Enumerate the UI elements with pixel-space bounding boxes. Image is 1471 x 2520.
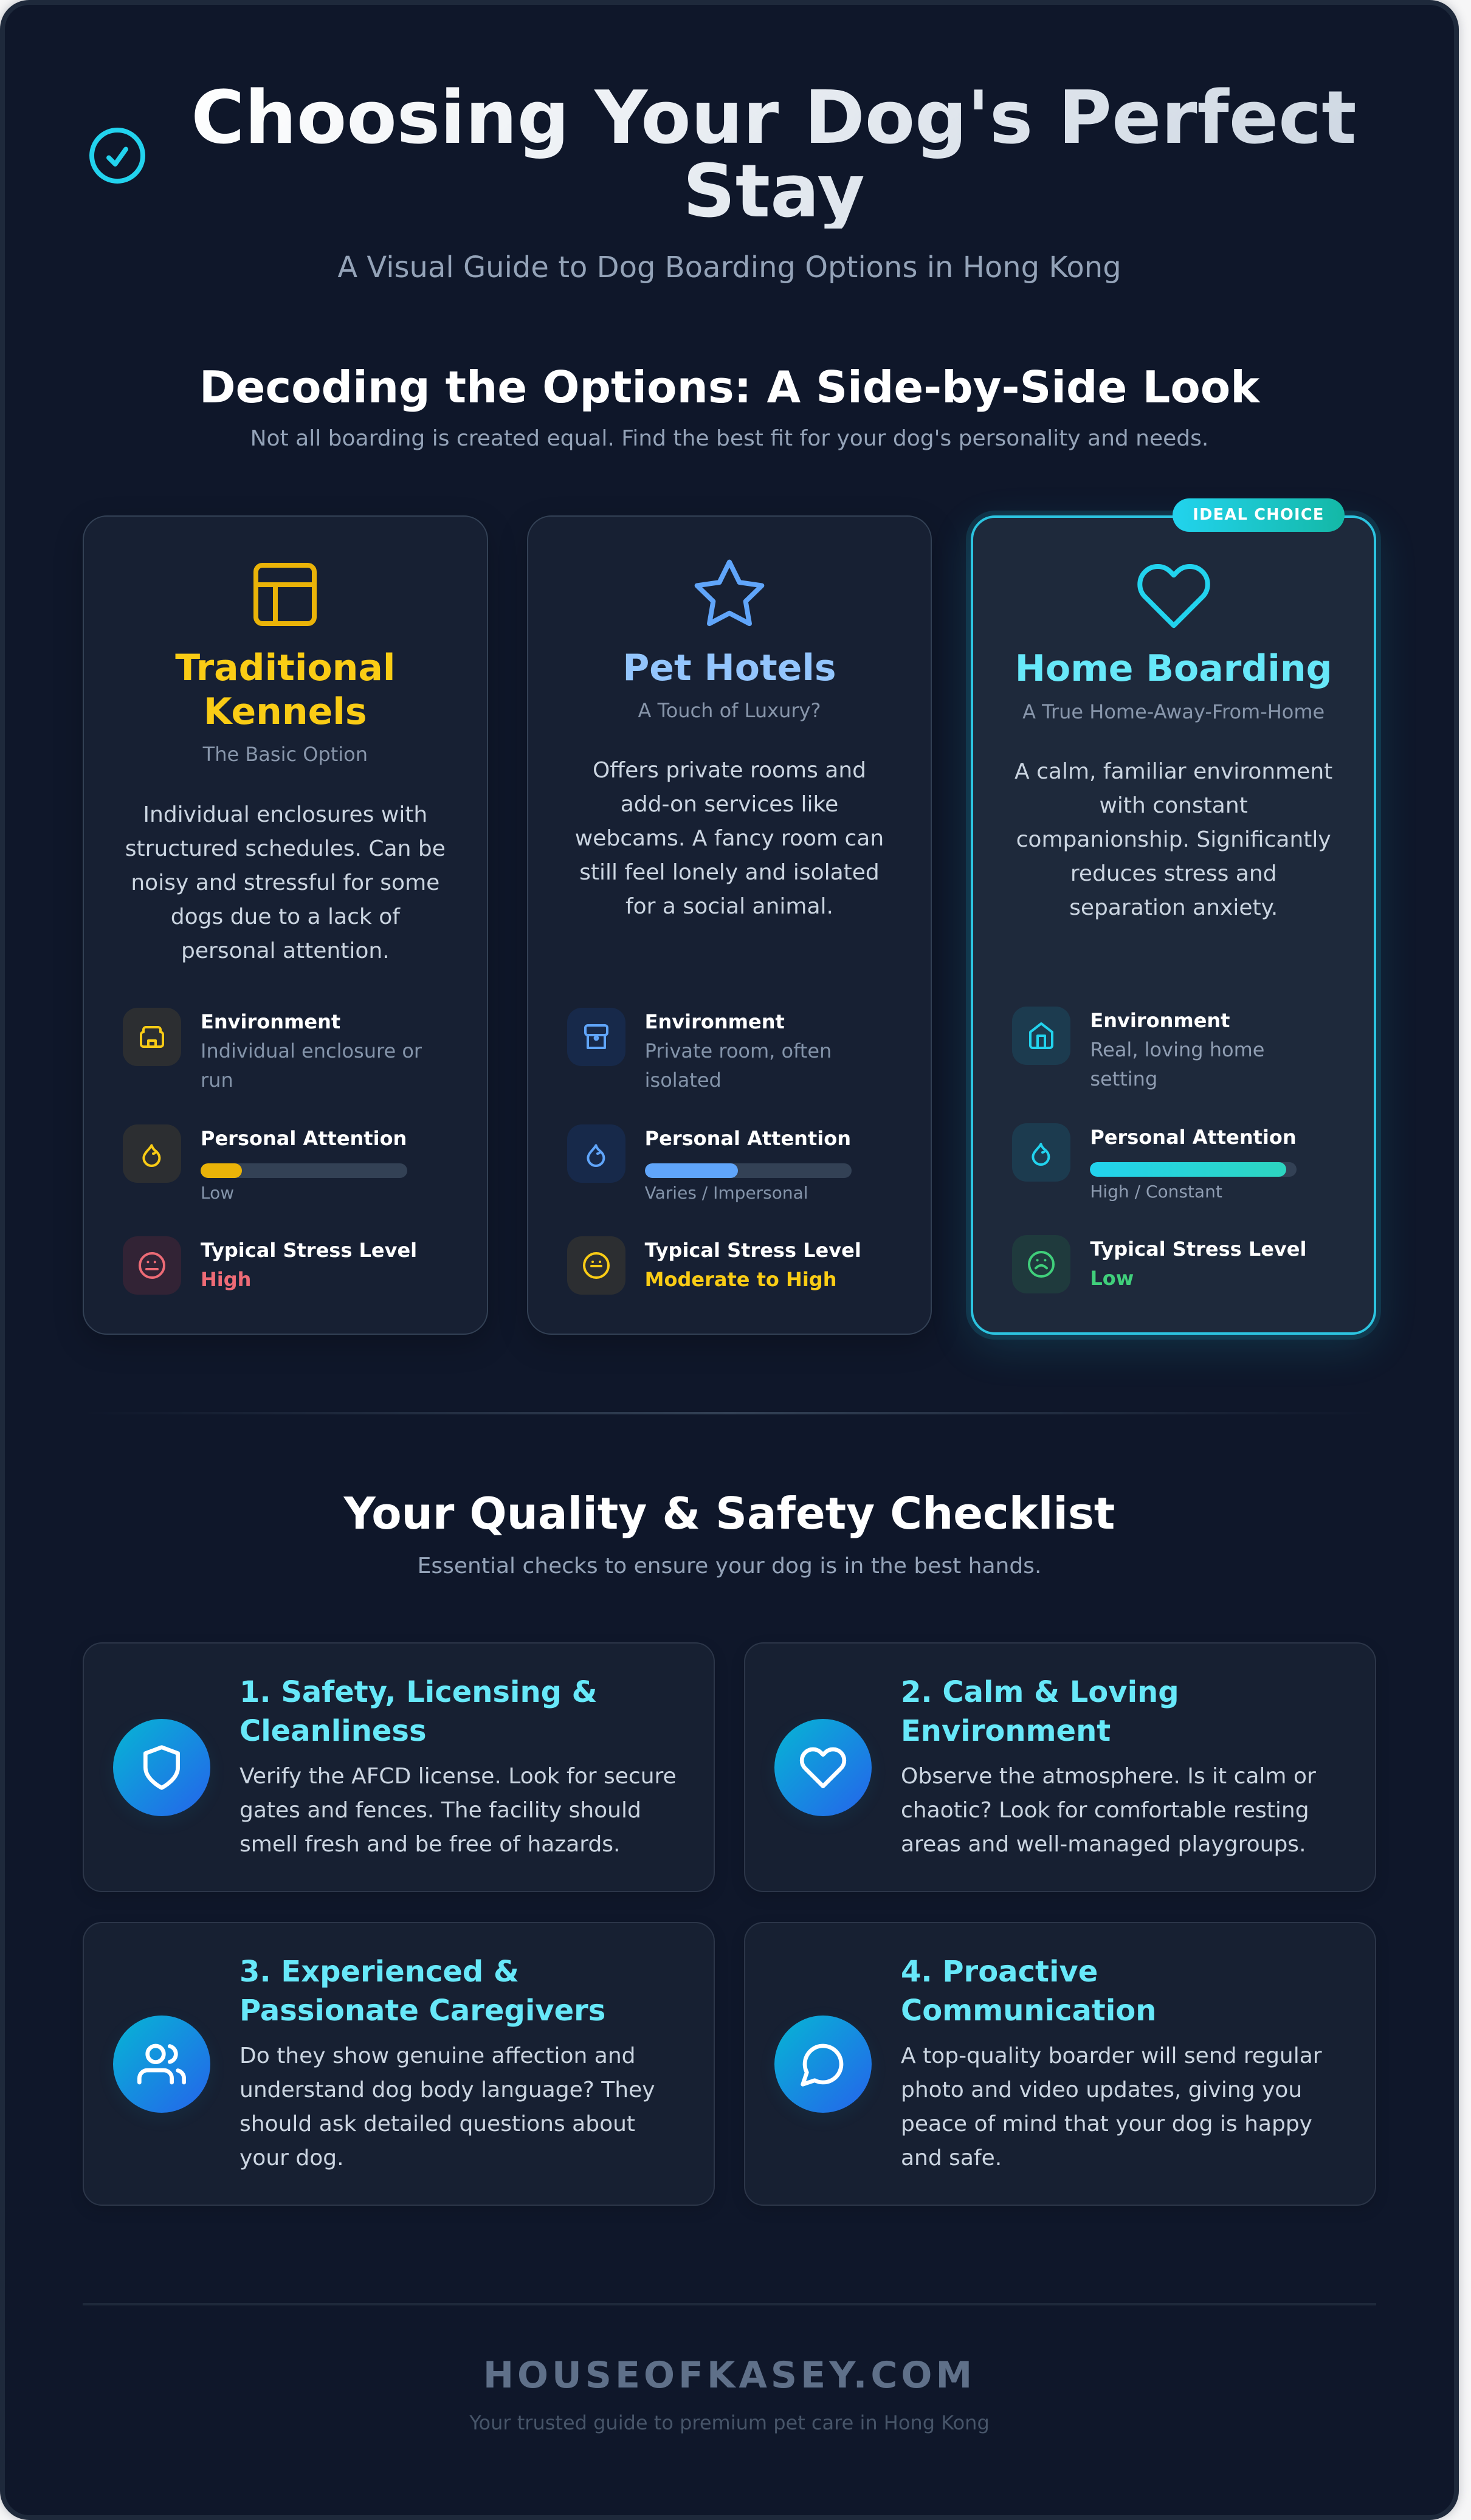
card description: webcams. A fancy room can (575, 826, 884, 851)
icon: flame (567, 1124, 625, 1183)
feature: environment (1012, 1007, 1264, 1090)
text: checklist intro: Essential checks to ensure your dog is in the best hands. (418, 1554, 1041, 1578)
panel: traditional kennels (83, 515, 488, 1335)
check heading: Passionate Caregivers (239, 1994, 605, 2028)
check heading: Cleanliness (239, 1714, 427, 1748)
icon: flame (123, 1124, 181, 1183)
label: Typical Stress Level (201, 1239, 417, 1262)
card description: with constant (1099, 793, 1248, 818)
value: High (201, 1268, 251, 1291)
value (1090, 1038, 1264, 1090)
card description: noisy and stressful for some (131, 870, 439, 895)
check text: your dog. (239, 2146, 344, 2171)
icon: flame (1012, 1123, 1070, 1182)
check text (901, 2039, 1322, 2175)
card subtitle: A Touch of Luxury? (638, 699, 821, 722)
feature: stress level (123, 1236, 417, 1295)
panel: home boarding (960, 498, 1387, 1357)
card description: personal attention. (181, 938, 390, 963)
card description: still feel lonely and isolated (579, 860, 880, 885)
check text: Do they show genuine affection and (239, 2043, 635, 2068)
check heading: 1. Safety, Licensing & (239, 1675, 598, 1709)
value: run (201, 1069, 233, 1092)
feature: stress level (567, 1236, 861, 1295)
badge: ideal choice: IDEAL CHOICE (1193, 506, 1325, 524)
feature: environment (567, 1008, 832, 1092)
value: Low (1090, 1267, 1134, 1290)
badge: ideal choice (1173, 498, 1345, 532)
card description: dogs due to a lack of (171, 904, 400, 929)
value (201, 1039, 422, 1092)
card description: structured schedules. Can be (125, 836, 446, 861)
icon: shield (113, 1719, 210, 1816)
footer brand: HOUSEOFKASEY.COM (483, 2354, 976, 2397)
feature: personal attention (567, 1124, 852, 1203)
progress bar: high (1090, 1162, 1297, 1177)
card title: home boarding: Home Boarding (1015, 647, 1332, 690)
icon: flat face (567, 1236, 625, 1295)
card subtitle: A True Home-Away-From-Home (1022, 700, 1325, 723)
card description: separation anxiety. (1069, 895, 1278, 920)
icon: heart (1137, 564, 1210, 628)
panel: pet hotels (527, 515, 932, 1335)
label: Typical Stress Level (645, 1239, 861, 1262)
check heading (239, 1673, 598, 1751)
card description: companionship. Significantly (1016, 827, 1331, 852)
check text: areas and well-managed playgroups. (901, 1832, 1306, 1857)
heading: decoding the options: Decoding the Options: A Side-by-Side Look (199, 362, 1259, 413)
label: Environment (201, 1010, 340, 1033)
label: Personal Attention (645, 1127, 851, 1150)
panel: safety, licensing and cleanliness (83, 1642, 715, 1892)
icon: chat bubble (774, 2016, 872, 2113)
check text: gates and fences. The facility should (239, 1798, 641, 1823)
card description: Individual enclosures with (143, 802, 427, 827)
text: decoding section intro: Not all boarding is created equal. Find the best fit for your dog's personality and needs. (250, 425, 1208, 451)
value: Moderate to High (645, 1268, 836, 1291)
check text: smell fresh and be free of hazards. (239, 1832, 621, 1857)
heading: checklist: Your Quality & Safety Checklist (344, 1488, 1115, 1539)
caption: Varies / Impersonal (645, 1183, 808, 1203)
card title: pet hotels: Pet Hotels (622, 647, 836, 689)
check heading (901, 1952, 1156, 2030)
icon: face (1012, 1235, 1070, 1293)
card description: add-on services like (621, 792, 838, 817)
label: Personal Attention (1090, 1126, 1297, 1149)
check text: A top-quality boarder will send regular (901, 2043, 1322, 2068)
value: Individual enclosure or (201, 1039, 422, 1062)
check heading (901, 1673, 1179, 1751)
value (645, 1039, 832, 1092)
check text: peace of mind that your dog is happy (901, 2112, 1312, 2136)
progress bar: varies (645, 1163, 852, 1178)
value: Real, loving home (1090, 1038, 1264, 1061)
subtitle: A Visual Guide to Dog Boarding Options in Hong Kong (337, 250, 1121, 284)
title: Choosing Your Dog's Perfect (191, 76, 1357, 160)
icon: neutral face (123, 1236, 181, 1295)
check text: Verify the AFCD license. Look for secure (239, 1764, 677, 1789)
value: setting (1090, 1067, 1157, 1090)
feature: personal attention (1012, 1123, 1334, 1203)
value: Private room, often (645, 1039, 832, 1062)
panel: calm and loving environment (744, 1642, 1376, 1892)
label: Environment (1090, 1009, 1230, 1032)
caption: High / Constant (1090, 1182, 1222, 1202)
label: Personal Attention (201, 1127, 407, 1150)
check text: chaotic? Look for comfortable resting (901, 1798, 1309, 1823)
card description: Offers private rooms and (593, 758, 866, 783)
feature: stress level (1012, 1235, 1334, 1293)
check text: photo and video updates, giving you (901, 2078, 1302, 2102)
check text: should ask detailed questions about (239, 2112, 635, 2136)
icon: heart (774, 1719, 872, 1816)
card title: traditional kennels: Traditional (175, 647, 395, 689)
progress bar: low (201, 1163, 407, 1178)
check heading: 3. Experienced & (239, 1955, 519, 1989)
check text: understand dog body language? They (239, 2078, 655, 2102)
title: Stay (683, 150, 865, 234)
card description (125, 802, 446, 963)
check text (239, 1760, 677, 1862)
card title: traditional kennels (175, 647, 395, 733)
card description: A calm, familiar environment (1015, 759, 1332, 784)
check text (239, 2039, 655, 2175)
check text: Observe the atmosphere. Is it calm or (901, 1764, 1316, 1789)
icon: star (694, 559, 765, 626)
card subtitle: The Basic Option (203, 743, 368, 766)
icon: home (1012, 1007, 1070, 1065)
feature: personal attention (123, 1124, 407, 1203)
card description: reduces stress and (1070, 861, 1276, 886)
check heading: Environment (901, 1714, 1111, 1748)
label: Environment (645, 1010, 785, 1033)
icon: enclosure (123, 1008, 181, 1066)
label: Typical Stress Level (1090, 1238, 1306, 1261)
check text: and safe. (901, 2146, 1002, 2171)
icon: private room (567, 1008, 625, 1066)
check heading: 4. Proactive (901, 1955, 1098, 1989)
icon: users (113, 2016, 210, 2113)
footer tagline: Your trusted guide to premium pet care in Hong Kong (469, 2411, 990, 2434)
value: isolated (645, 1069, 722, 1092)
check heading: Communication (901, 1994, 1156, 2028)
panel: experienced caregivers (83, 1922, 715, 2206)
icon: header check circle (89, 128, 145, 184)
title (186, 81, 1362, 229)
panel: proactive communication (744, 1922, 1376, 2206)
card title: traditional kennels: Kennels (204, 690, 367, 733)
feature: environment (123, 1008, 422, 1092)
check heading: 2. Calm & Loving (901, 1675, 1179, 1709)
icon: kennel layout (253, 563, 317, 626)
card description (1015, 759, 1332, 920)
card description (575, 758, 884, 919)
check text (901, 1760, 1316, 1862)
card description: for a social animal. (625, 894, 833, 919)
check heading (239, 1952, 605, 2030)
caption: Low (201, 1183, 234, 1203)
